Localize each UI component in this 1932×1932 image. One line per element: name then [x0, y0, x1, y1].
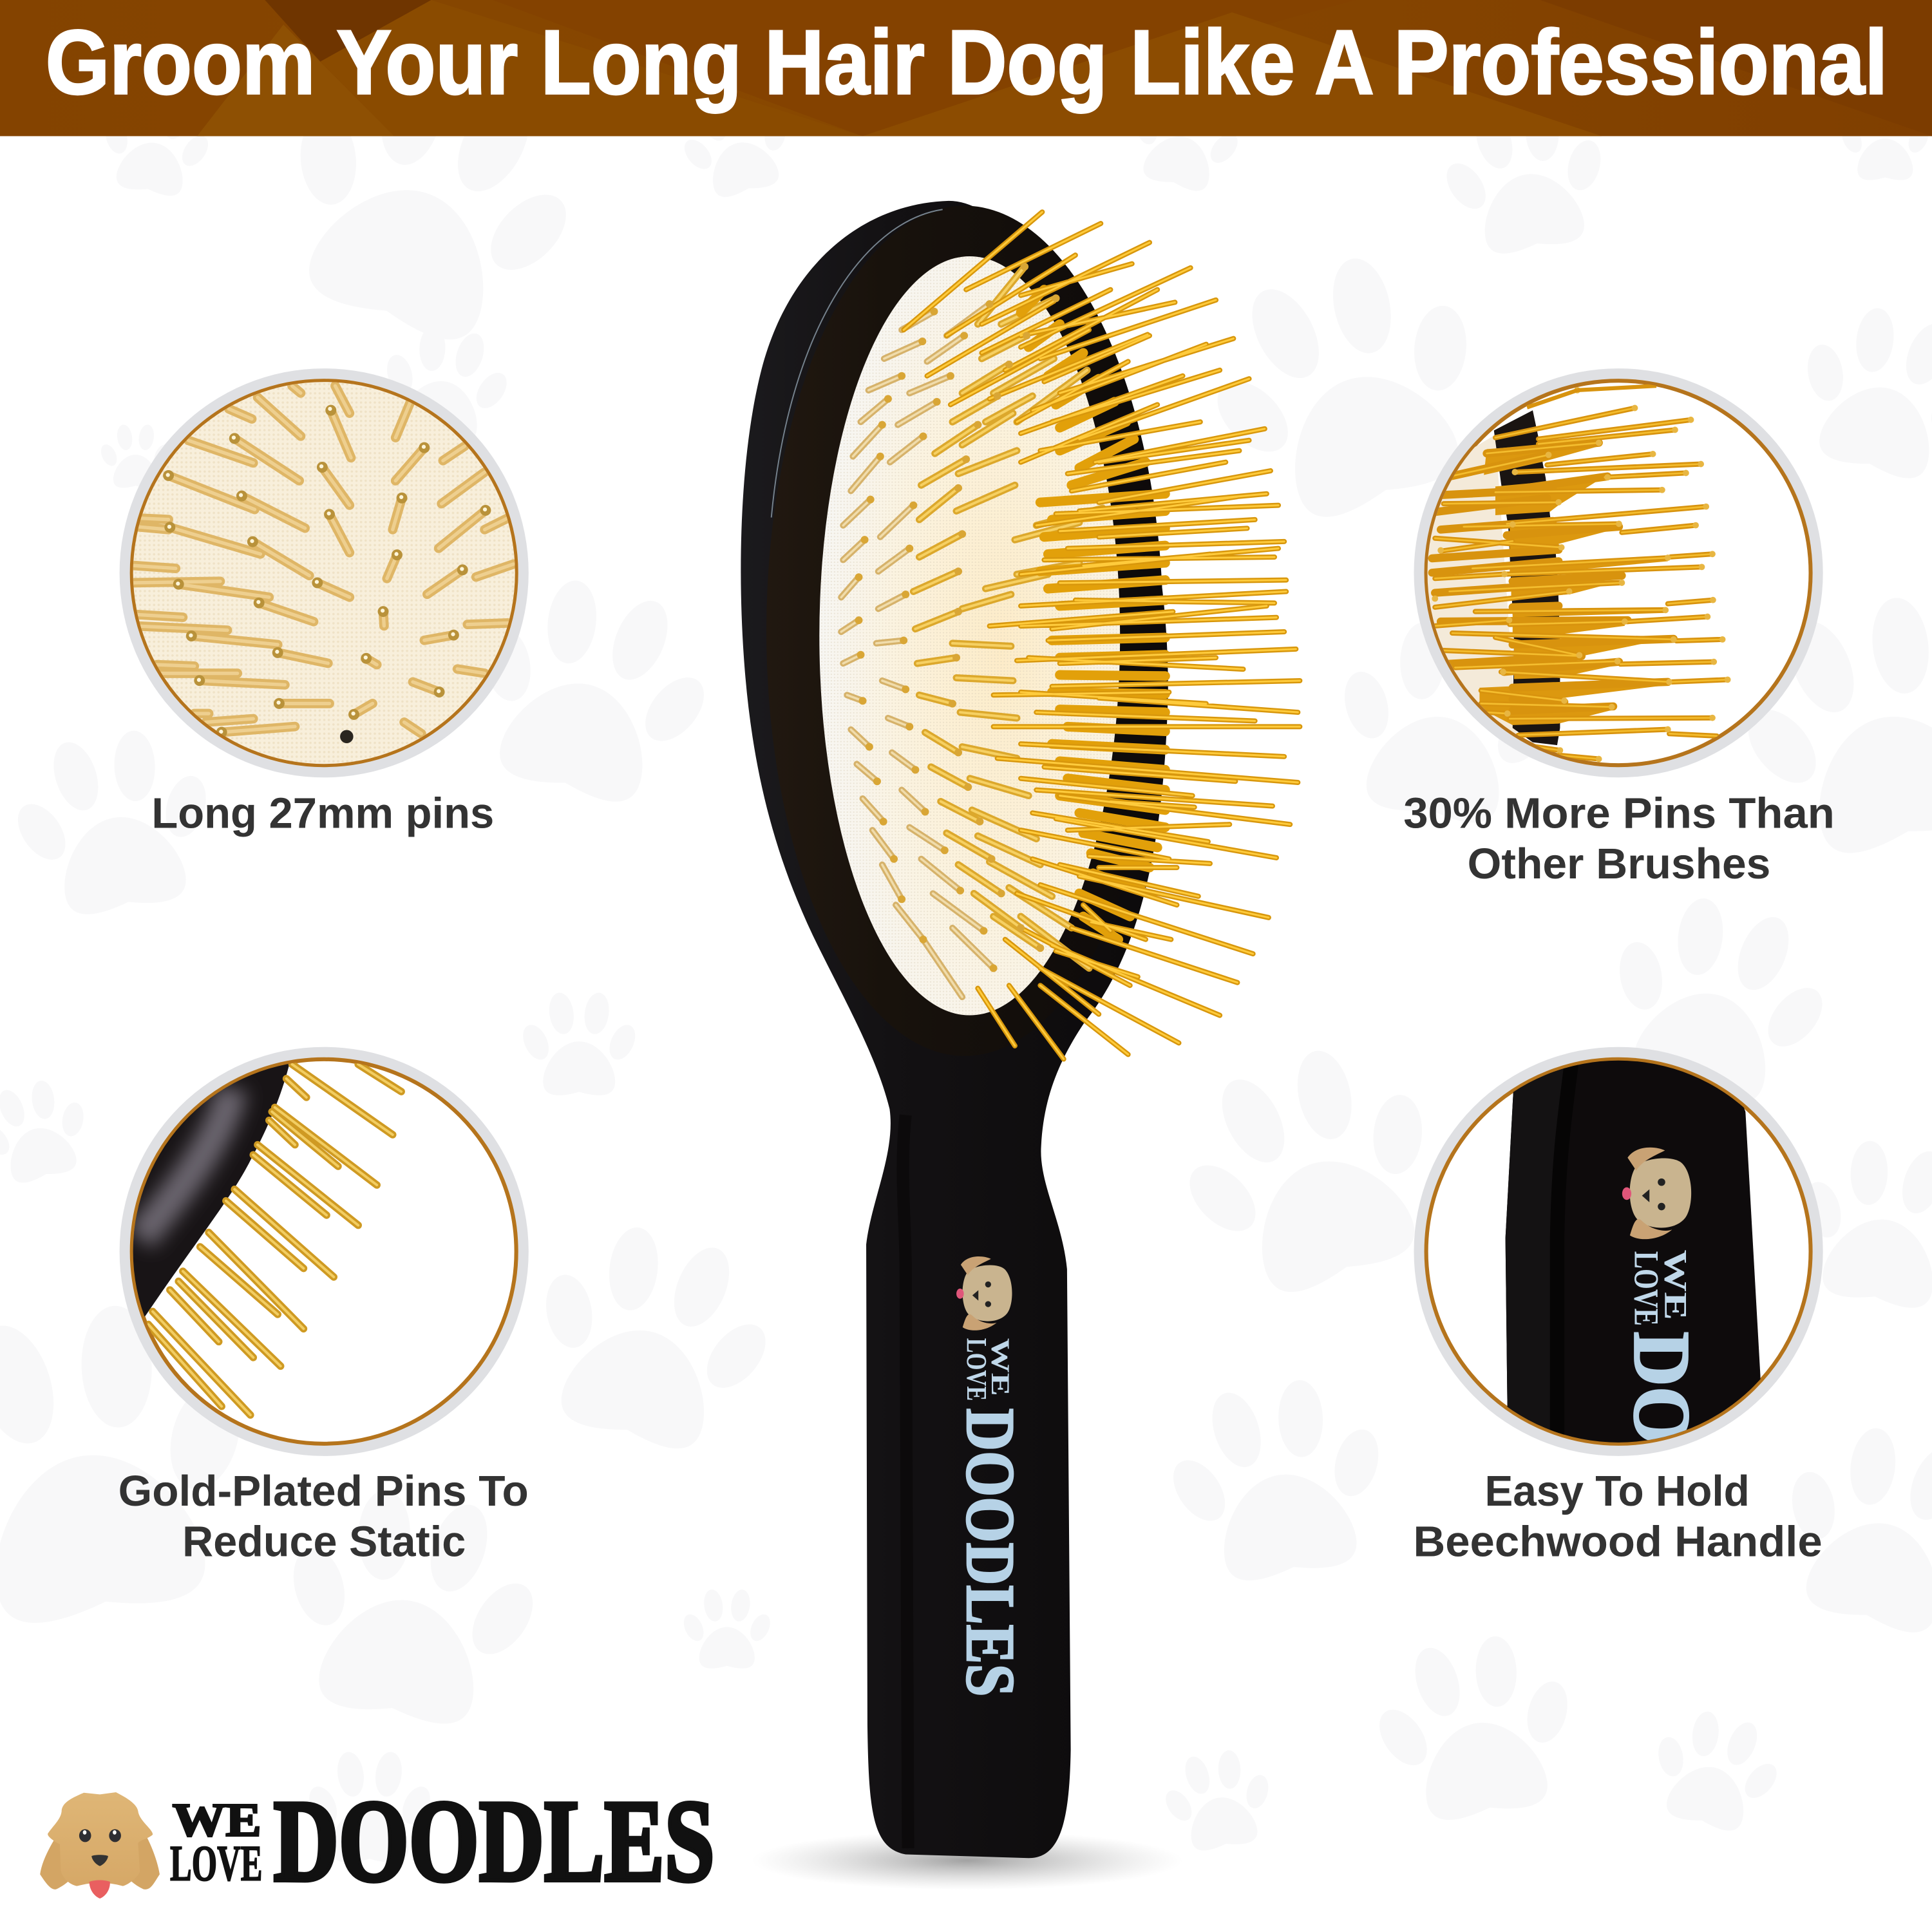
- close-up photo of pins on pad: [133, 382, 515, 764]
- close-up photo of handle: LOVE: [1627, 1251, 1665, 1326]
- gold pin mass: [1479, 440, 1674, 725]
- close-up photo of dense pins: [1423, 386, 1728, 759]
- label line two: Reduce Static: [182, 1517, 466, 1566]
- label line two: Other Brushes: [1468, 840, 1770, 888]
- rubber pin pad: [819, 256, 1120, 1016]
- brush face ring: [766, 206, 1163, 1056]
- feature: long pins: [97, 354, 547, 838]
- logo text: love: LOVE: [170, 1835, 263, 1891]
- label line two: Beechwood Handle: [1414, 1517, 1823, 1566]
- circle ring: [1414, 1047, 1823, 1456]
- icon: doodle dog face: [40, 1792, 160, 1899]
- handle bevel: [903, 1115, 908, 1848]
- feature: gold-plated pins: [97, 1037, 529, 1566]
- feature: beechwood handle: [1414, 1047, 1823, 1703]
- gold pins: [841, 212, 1300, 1059]
- handle logo: we love: LOVE: [961, 1338, 992, 1401]
- handle logo: we love: [961, 1338, 1015, 1401]
- label: Gold-Plated Pins To: [118, 1467, 529, 1515]
- product: gold pin brush: [741, 201, 1300, 1858]
- circle ring: [120, 368, 529, 777]
- logo text: we: WE: [173, 1794, 261, 1846]
- handle logo: we love: WE: [986, 1338, 1015, 1396]
- header banner: [0, 0, 1932, 136]
- close-up photo of handle: WE: [1658, 1250, 1694, 1320]
- close-up photo of handle: DOODLES: [1616, 1332, 1705, 1703]
- logo text: doodles: DOODLES: [274, 1777, 715, 1906]
- circle ring: [1414, 368, 1823, 777]
- close-up photo of handle: [1506, 1060, 1761, 1443]
- brand logo: [40, 1777, 715, 1906]
- handle logo: doodles: DOODLES: [952, 1408, 1028, 1697]
- close-up photo of black rim and pins: [133, 1063, 405, 1419]
- label: Easy To Hold: [1484, 1467, 1750, 1515]
- brush shadow: [752, 1831, 1183, 1890]
- label: Long 27mm pins: [151, 790, 494, 838]
- feature: more pins: [1403, 368, 1835, 888]
- circle ring: [120, 1047, 529, 1456]
- label: 30% More Pins Than: [1403, 790, 1835, 838]
- handle logo: dog face: [956, 1256, 1012, 1331]
- brush body and handle: [741, 201, 1168, 1858]
